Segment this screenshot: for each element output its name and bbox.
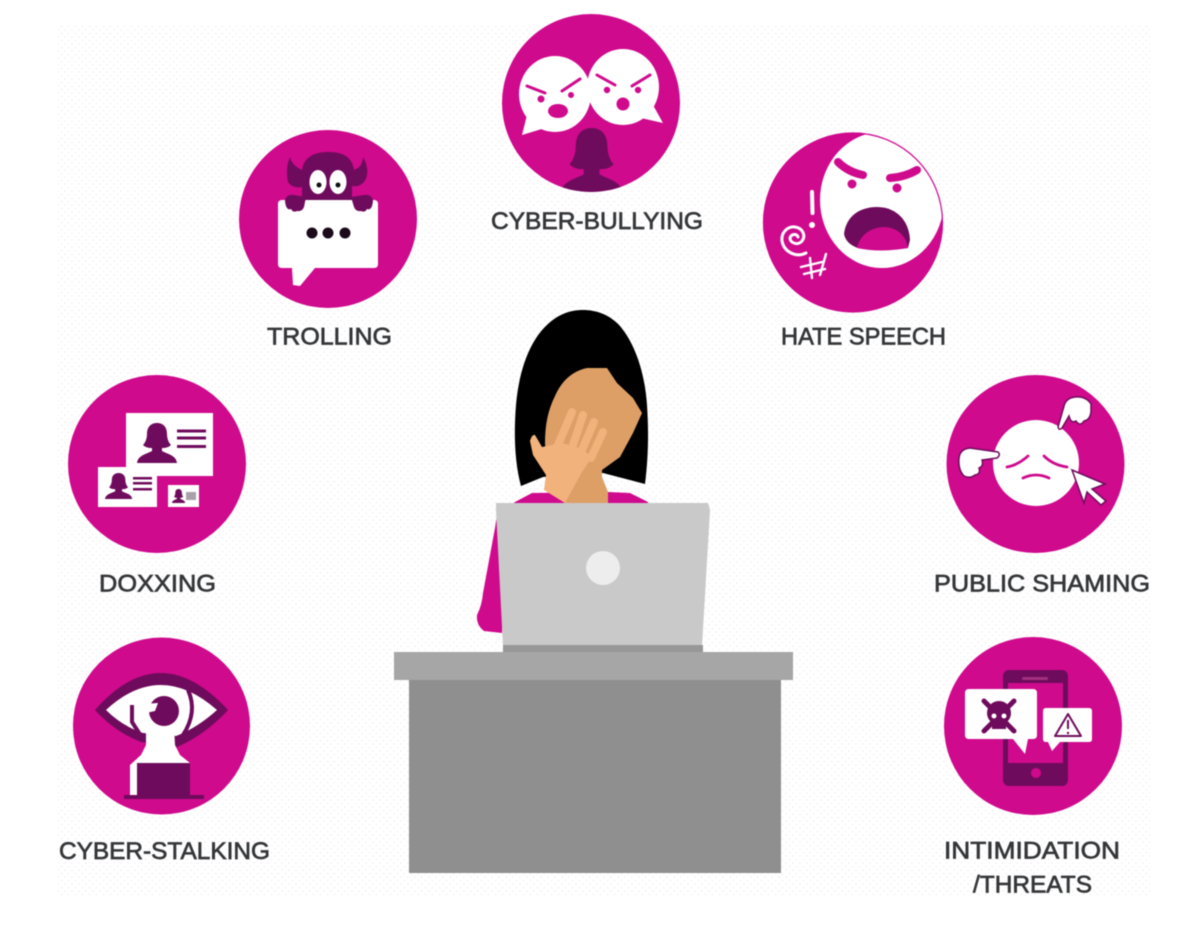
panel: cyber-stalking (59, 638, 270, 865)
icon: shouting face with symbols (763, 132, 944, 312)
label: intimidation / threats (945, 840, 1119, 894)
hand covering the face (530, 412, 603, 503)
panel: doxxing (68, 375, 246, 598)
icon: two angry speech bubbles over a person (502, 14, 680, 194)
label: trolling: TROLLING (267, 324, 392, 350)
laptop base (503, 645, 703, 653)
label: public shaming: PUBLIC SHAMING (934, 570, 1150, 598)
desk body (409, 680, 781, 873)
label: cyber-bullying: CYBER-BULLYING (491, 208, 703, 235)
label: doxxing: DOXXING (99, 570, 216, 598)
desk top (394, 652, 793, 680)
icon: monster peeking over a speech bubble (239, 130, 417, 308)
panel: hate speech (763, 132, 946, 350)
icon: eye above a person at a laptop (73, 638, 250, 814)
label: intimidation / threats: INTIMIDATION (944, 838, 1120, 864)
central figure: woman at desk with laptop (394, 310, 793, 873)
face and neck (545, 368, 642, 503)
icon: sad face with pointing hands and cursor (946, 375, 1124, 553)
laptop lid (496, 503, 710, 646)
left arm and shoulders in pink top (477, 492, 648, 633)
label: cyber-stalking: CYBER-STALKING (59, 838, 270, 865)
icon: ID cards with person silhouettes (68, 375, 246, 553)
icon: phone with skull and warning bubbles (944, 637, 1122, 815)
woman's hair (515, 310, 648, 486)
laptop logo (586, 551, 620, 585)
label: hate speech: HATE SPEECH (781, 324, 946, 350)
panel: public shaming (934, 375, 1150, 598)
panel: trolling (239, 130, 417, 350)
label: intimidation / threats: /THREATS (973, 872, 1092, 898)
panel: cyber-bullying (491, 14, 703, 235)
panel: intimidation / threats (944, 637, 1122, 898)
